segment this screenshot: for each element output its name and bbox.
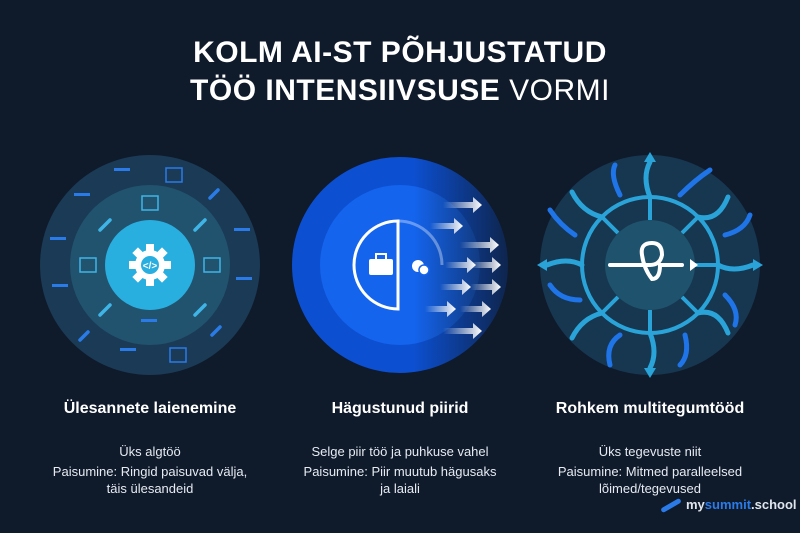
- text: blurred boundaries: [304, 444, 496, 496]
- icon: gear with code: [129, 244, 171, 286]
- panel: multitasking circle: [537, 152, 763, 378]
- text: task expansion: Üks algtöö: [119, 444, 181, 459]
- icon: gear with code: </>: [143, 261, 157, 272]
- heading: task expansion: Ülesannete laienemine: [64, 400, 236, 417]
- panel: task expansion circles: [40, 155, 260, 375]
- panel: blurred boundaries circle: [290, 150, 515, 380]
- text: task expansion: Paisumine: Ringid paisuvad välja,: [53, 464, 247, 479]
- logo: mysummit.school: [686, 497, 797, 512]
- icon: sun and moon: [412, 260, 424, 272]
- text: multitasking: lõimed/tegevused: [599, 481, 701, 496]
- text: task expansion: täis ülesandeid: [107, 481, 193, 496]
- text: multitasking: Paisumine: Mitmed paralleelsed: [558, 464, 742, 479]
- icons: wrenches and blueprints: [80, 168, 220, 362]
- icon: briefcase: [369, 254, 393, 275]
- text: task expansion: [53, 444, 247, 496]
- text: blurred boundaries: ja laiali: [380, 481, 420, 496]
- text: blurred boundaries: Selge piir töö ja puhkuse vahel: [311, 444, 489, 459]
- title: [190, 36, 610, 107]
- text: multitasking: [558, 444, 742, 496]
- icon: half circle boundary: [354, 221, 398, 309]
- icon: looping arrow: [610, 243, 682, 279]
- text: multitasking: Üks tegevuste niit: [599, 444, 701, 459]
- heading: blurred boundaries: Hägustunud piirid: [332, 400, 468, 417]
- wavy outward arrows: [547, 162, 753, 368]
- title: KOLM AI-ST PÕHJUSTATUD: [193, 36, 607, 69]
- heading: multitasking: Rohkem multitegumtööd: [556, 400, 744, 417]
- title: TÖÖ INTENSIIVSUSE VORMI: [190, 74, 610, 107]
- text: blurred boundaries: Paisumine: Piir muutub hägusaks: [304, 464, 496, 479]
- arrows: [425, 197, 501, 339]
